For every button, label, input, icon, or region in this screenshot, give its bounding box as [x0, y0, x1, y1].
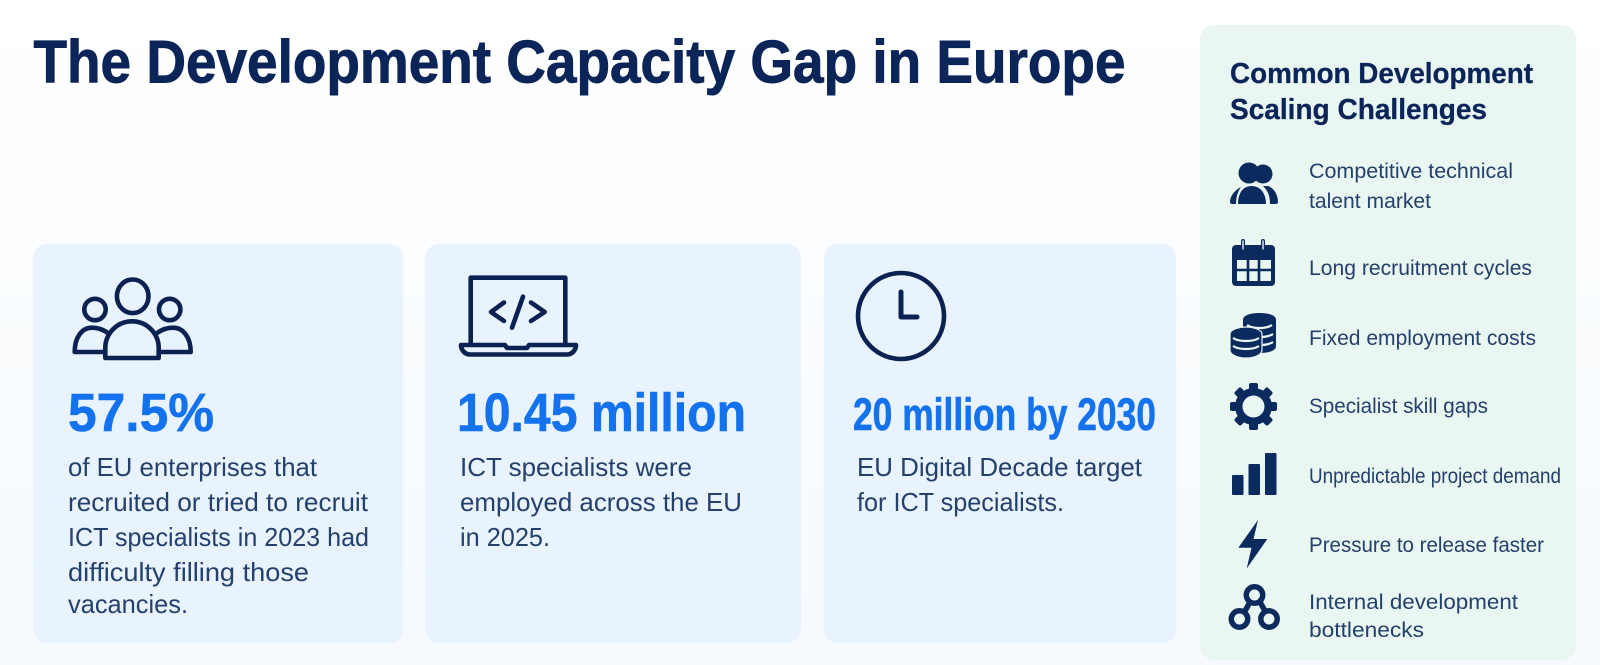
icon: clock	[858, 273, 944, 359]
icon: two people	[1230, 162, 1278, 204]
item text: release pressure: Pressure to release faster	[1309, 534, 1544, 557]
item text: talent market	[1309, 160, 1513, 213]
stat value: 57.5%	[68, 383, 214, 443]
icon: bar chart	[1232, 453, 1276, 495]
panel: stat card 57.5%	[33, 244, 403, 643]
stat description	[68, 452, 369, 619]
item text: bottlenecks: Internal development	[1309, 591, 1518, 614]
stat description: difficulty filling those	[68, 557, 309, 587]
stat description	[857, 452, 1143, 517]
icon: gear	[1230, 383, 1277, 430]
stat description: recruited or tried to recruit	[68, 487, 369, 517]
title: The Development Capacity Gap in Europe	[34, 28, 1126, 96]
panel: stat card 10.45 million	[425, 244, 801, 643]
item text: project demand: Unpredictable project demand	[1309, 465, 1561, 488]
item text: skill gaps: Specialist skill gaps	[1309, 395, 1488, 418]
panel heading: Common Development	[1230, 58, 1533, 90]
panel heading: Scaling Challenges	[1230, 94, 1487, 126]
item text: bottlenecks	[1309, 591, 1518, 642]
panel heading	[1230, 58, 1533, 126]
item text: talent market: Competitive technical	[1309, 160, 1513, 183]
icon: lightning bolt	[1238, 520, 1267, 568]
icon: network nodes	[1231, 587, 1277, 627]
stat description: EU Digital Decade target	[857, 452, 1143, 482]
stat description	[460, 452, 742, 552]
icon: coins	[1230, 313, 1276, 358]
item text: employment costs: Fixed employment costs	[1309, 327, 1536, 350]
stat description: in 2025.	[460, 522, 550, 552]
item text: talent market: talent market	[1309, 190, 1431, 213]
panel: stat card 20 million by 2030	[824, 244, 1176, 643]
stat value: 20 million by 2030	[853, 389, 1156, 440]
icon: laptop with code	[461, 278, 576, 354]
item text: recruitment cycles: Long recruitment cycles	[1309, 257, 1532, 280]
stat description: vacancies.	[68, 589, 188, 619]
item text: bottlenecks: bottlenecks	[1309, 619, 1424, 642]
stat description: ICT specialists were	[460, 452, 692, 482]
icon: calendar	[1232, 241, 1275, 286]
panel: common development scaling challenges	[1200, 25, 1576, 660]
stat description: ICT specialists in 2023 had	[68, 522, 369, 552]
icon: people group	[75, 280, 191, 358]
stat description: of EU enterprises that	[68, 452, 318, 482]
stat value: 10.45 million	[457, 383, 746, 443]
stat description: for ICT specialists.	[857, 487, 1064, 517]
stat description: employed across the EU	[460, 487, 742, 517]
